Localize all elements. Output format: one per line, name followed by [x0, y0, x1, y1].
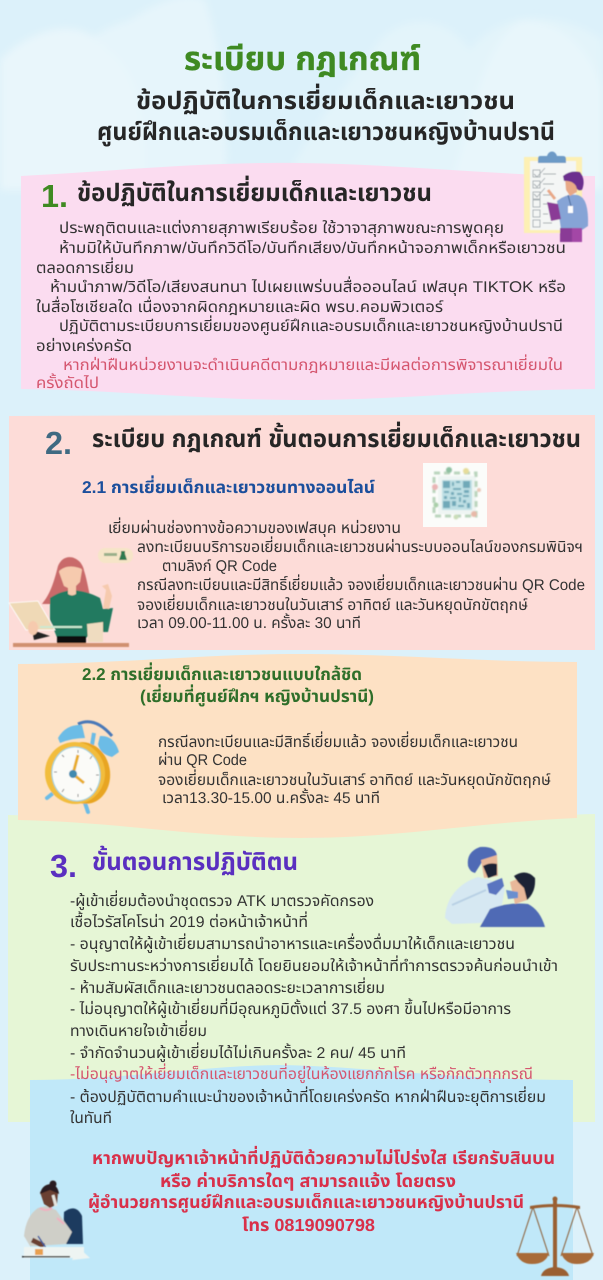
subheading: 2.2 in-person visit: (เยี่ยมที่ศูนย์ฝึกฯ หญิงบ้านปรานี)	[140, 684, 374, 707]
text block: section 3 procedure: - อนุญาตให้ผู้เข้าเยี่ยมสามารถนำอาหารและเครื่องดื่มมาให้เด็กและเยาวชน	[70, 933, 515, 954]
text block: section 3 procedure	[70, 890, 558, 1063]
icon: alarm clock	[40, 722, 119, 812]
warning text: section 1: ครั้งถัดไป	[36, 373, 99, 392]
icon: nasal swab test	[445, 847, 545, 927]
text block: section 1 rules: ตลอดการเยี่ยม	[36, 257, 134, 277]
panel: section 2 rules	[9, 415, 595, 650]
text block: online visit steps: กรณีลงทะเบียนและมีสิทธิ์เยี่ยมแล้ว จองเยี่ยมเด็กและเยาวชนผ่าน QR Code	[137, 574, 585, 594]
icon: woman on phone at desk	[22, 1180, 90, 1260]
icon: person with checklist clipboard	[524, 152, 588, 242]
subheading: 2.2 in-person visit	[82, 662, 374, 707]
text block: section 3 procedure: ทางเดินหายใจเข้าเยี่ยม	[70, 1020, 207, 1040]
text block: section 1 rules: ห้ามมิให้บันทึกภาพ/บันทึกวิดีโอ/บันทึกเสียง/บันทึกหน้าจอภาพเด็กหรือเยาวชน	[59, 239, 566, 257]
text block: in-person visit details: ผ่าน QR Code	[158, 751, 247, 769]
text block: complaint contact: หากพบปัญหาเจ้าหน้าที่ปฏิบัติด้วยความไม่โปร่งใส เรียกรับสินบน	[92, 1145, 555, 1168]
text block: complaint contact: หรือ ค่าบริการใดๆ สามารถแจ้ง โดยตรง	[160, 1171, 456, 1191]
panel: 2.2 in-person visit	[18, 654, 577, 838]
text block: section 3 procedure: - ไม่อนุญาตให้ผู้เข้าเยี่ยมที่มีอุณหภูมิตั้งแต่ 37.5 องศา ขึ้นไปหรือมีอาการ	[70, 998, 511, 1019]
text block: section 3 last rule: - ต้องปฏิบัติตามคำแนะนำของเจ้าหน้าที่โดยเคร่งครัด หากฝ่าฝืนจะยุติการเยี่ยม	[70, 1086, 546, 1107]
subheading: 2.1 online visit: 2.1 การเยี่ยมเด็กและเยาวชนทางออนไลน์	[82, 475, 375, 497]
text block: complaint contact: โทร 0819090798	[242, 1215, 375, 1235]
text block: online visit steps: ตามลิงก์ QR Code	[162, 558, 277, 575]
warning text: section 3: -ไม่อนุญาตให้เยี่ยมเด็กและเยาวชนที่อยู่ในห้องแยกกักโรค หรือกักตัวทุกกรณี	[70, 1063, 533, 1084]
text block: section 3 procedure: -ผู้เข้าเยี่ยมต้องนำชุดตรวจ ATK มาตรวจคัดกรอง	[70, 890, 374, 911]
text block: section 1 rules: ห้ามนำภาพ/วิดีโอ/เสียงสนทนา ไปเผยแพร่บนสื่อออนไลน์ เฟสบุค TIKTOK หรือ	[50, 276, 566, 297]
title: ระเบียบ กฎเกณฑ์	[184, 40, 421, 77]
text block: in-person visit details: กรณีลงทะเบียนและมีสิทธิ์เยี่ยมแล้ว จองเยี่ยมเด็กและเยาวชน	[158, 731, 518, 751]
text block: section 1 rules	[36, 219, 566, 355]
icon: woman with tablet	[9, 548, 133, 647]
icon: balance scales	[516, 1196, 594, 1276]
text block: section 1 rules: อย่างเคร่งครัด	[36, 337, 132, 355]
heading: section 1: 1.	[41, 178, 68, 214]
text block: section 1 rules: ในสื่อโซเชียลใด เนื่องจากผิดกฎหมายและผิด พรบ.คอมพิวเตอร์	[36, 296, 444, 316]
text block: complaint contact: ผู้อำนวยการศูนย์ฝึกและอบรมเด็กและเยาวชนหญิงบ้านปรานี	[88, 1192, 524, 1213]
heading: section 3: ขั้นตอนการปฏิบัติตน	[92, 845, 298, 876]
panel: section 1 rules	[21, 163, 595, 400]
text block: section 3 procedure: - ห้ามสัมผัสเด็กและเยาวชนตลอดระยะเวลาการเยี่ยม	[70, 977, 385, 997]
text block: complaint contact	[88, 1145, 555, 1235]
text block: online visit steps	[108, 517, 585, 632]
subtitle: ข้อปฏิบัติในการเยี่ยมเด็กและเยาวชน	[136, 83, 515, 115]
text block: section 3 procedure: เชื้อไวรัสโคโรน่า 2019 ต่อหน้าเจ้าหน้าที่	[70, 911, 308, 931]
heading: section 2: 2.	[45, 425, 72, 461]
panel: section 3 procedure	[8, 814, 595, 1122]
text block: section 3 last rule	[70, 1086, 546, 1127]
warning text: section 1: หากฝ่าฝืนหน่วยงานจะดำเนินคดีตามกฎหมายและมีผลต่อการพิจารณาเยี่ยมใน	[63, 354, 563, 374]
text block: online visit steps: เวลา 09.00-11.00 น. ครั้งละ 30 นาที	[137, 613, 361, 632]
heading: section 1: ข้อปฏิบัติในการเยี่ยมเด็กและเยาวชน	[77, 175, 432, 207]
text block: section 1 rules: ปฏิบัติตามระเบียบการเยี่ยมของศูนย์ฝึกและอบรมเด็กและเยาวชนหญิงบ้านปรานี	[59, 315, 563, 336]
text block: section 3 procedure: - จำกัดจำนวนผู้เข้าเยี่ยมได้ไม่เกินครั้งละ 2 คน/ 45 นาที	[70, 1042, 406, 1063]
text block: in-person visit details	[158, 731, 551, 807]
text block: section 3 last rule: ในทันที	[70, 1110, 112, 1127]
heading: section 3	[50, 845, 298, 884]
heading: section 3: 3.	[50, 848, 77, 884]
subtitle	[97, 83, 555, 147]
heading: section 2: ระเบียบ กฎเกณฑ์ ขั้นตอนการเยี่ยมเด็กและเยาวชน	[92, 421, 581, 453]
icon: QR code with floral frame	[423, 463, 487, 527]
subtitle: ศูนย์ฝึกและอบรมเด็กและเยาวชนหญิงบ้านปรานี	[97, 119, 555, 147]
heading: section 2	[45, 421, 581, 461]
subheading: 2.2 in-person visit: 2.2 การเยี่ยมเด็กและเยาวชนแบบใกล้ชิด	[82, 662, 362, 684]
text block: online visit steps: จองเยี่ยมเด็กและเยาวชนในวันเสาร์ อาทิตย์ และวันหยุดนักขัตฤกษ์	[137, 594, 528, 615]
panel: complaint contact	[30, 1063, 573, 1280]
heading: section 1	[41, 175, 432, 214]
warning text: section 1	[36, 354, 563, 392]
text block: in-person visit details: จองเยี่ยมเด็กและเยาวชนในวันเสาร์ อาทิตย์ และวันหยุดนักขัตฤกษ์	[158, 769, 551, 790]
text block: in-person visit details: เวลา13.30-15.00 น.ครั้งละ 45 นาที	[162, 788, 380, 807]
text block: section 3 procedure: รับประทานระหว่างการเยี่ยมได้ โดยยินยอมให้เจ้าหน้าที่ทำการตรวจค้นก่อนนำเข้า	[70, 955, 558, 975]
text block: online visit steps: เยี่ยมผ่านช่องทางข้อความของเฟสบุค หน่วยงาน	[108, 517, 401, 538]
text block: section 1 rules: ประพฤติตนและแต่งกายสุภาพเรียบร้อย ใช้วาจาสุภาพขณะการพูดคุย	[59, 219, 504, 238]
text block: online visit steps: ลงทะเบียนบริการขอเยี่ยมเด็กและเยาวชนผ่านระบบออนไลน์ของกรมพินิจฯ	[137, 536, 583, 556]
